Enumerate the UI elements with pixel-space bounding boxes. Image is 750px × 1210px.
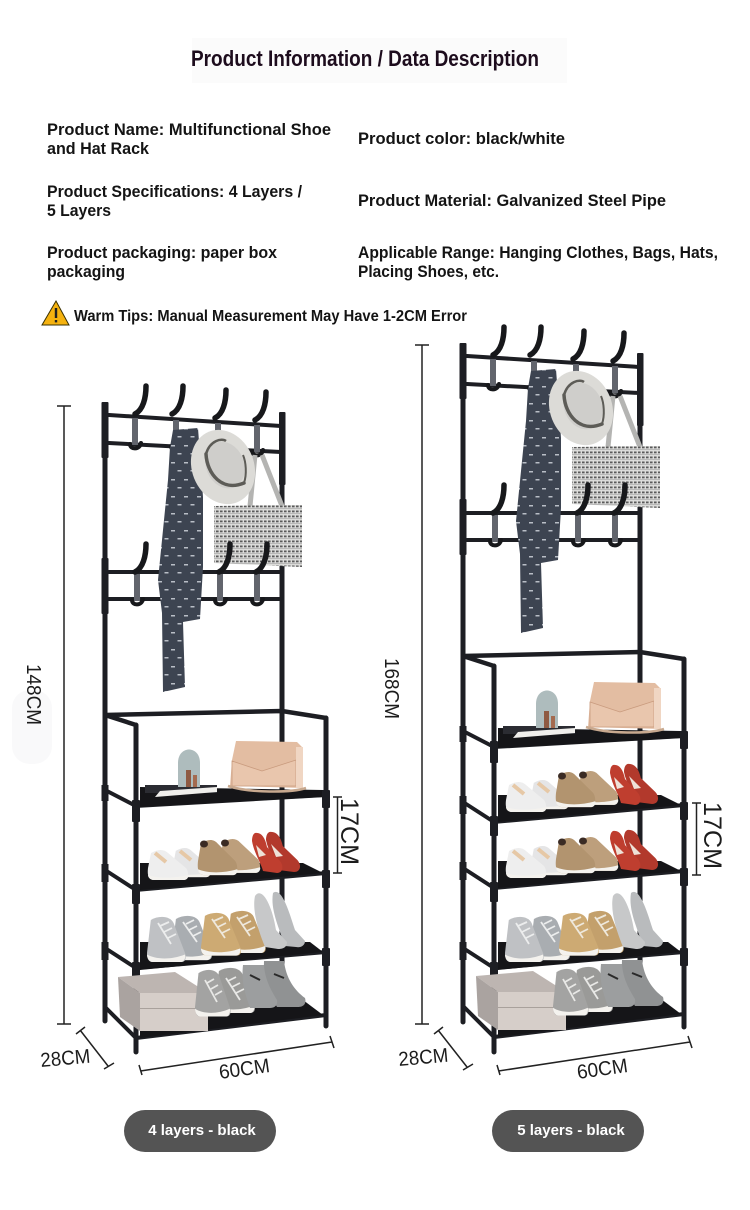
applicable range: Placing Shoes, etc. xyxy=(358,262,499,281)
icon: warning triangle xyxy=(42,301,69,325)
dimension: 17CM shelf spacing, 4 layers: 17CM xyxy=(335,798,363,865)
label pill: 5 layers - black xyxy=(492,1110,644,1152)
shelf 4 with box and boots xyxy=(105,961,326,1038)
dimension: 28CM depth, 4 layers: 28CM xyxy=(40,1046,91,1072)
shelf 5 with box and boots xyxy=(463,960,684,1037)
warm tips text: Warm Tips: Manual Measurement May Have 1-2CM Error xyxy=(74,308,467,325)
rack frame xyxy=(460,343,684,993)
dimension: 60CM width, 4 layers: 60CM xyxy=(218,1055,271,1084)
product name: and Hat Rack xyxy=(47,139,150,158)
product specifications: 5 Layers xyxy=(47,201,111,220)
shelf 3 with shoes xyxy=(102,892,330,982)
dimension: 148CM height xyxy=(12,406,71,1024)
shelf 2 with shoes xyxy=(102,832,330,904)
shelf 4 with shoes xyxy=(460,892,688,982)
warm tips callout xyxy=(42,301,467,325)
dimension: 168CM height xyxy=(380,345,429,1024)
product information text block xyxy=(47,120,718,281)
shelf 1 with items xyxy=(460,682,688,763)
dimension: 28CM depth, 5 layers: 28CM xyxy=(398,1045,449,1071)
shelf 1 with items xyxy=(102,741,330,822)
dimension: 60CM width, 4 layers xyxy=(139,1036,334,1084)
shelf 3 with shoes xyxy=(460,830,688,902)
shelf 2 with shoes xyxy=(460,764,688,836)
product specifications: Product Specifications: 4 Layers / xyxy=(47,182,302,201)
dimension: 28CM depth, 4 layers xyxy=(40,1027,114,1072)
coat hooks with scarf, hat and bag xyxy=(109,386,302,692)
product material: Product Material: Galvanized Steel Pipe xyxy=(358,191,666,210)
frame post extensions xyxy=(463,946,684,1052)
dimension: 28CM depth, 5 layers xyxy=(398,1027,473,1071)
label pill: 4 layers - black xyxy=(124,1110,276,1152)
label pill: 5 layers - black: 5 layers - black xyxy=(517,1122,625,1139)
dimension: 60CM width, 5 layers xyxy=(497,1036,692,1084)
rack frame xyxy=(102,402,326,1052)
rack: 5 layers xyxy=(460,327,688,1052)
product packaging: Product packaging: paper box xyxy=(47,243,278,262)
label pill: 4 layers - black: 4 layers - black xyxy=(148,1122,256,1139)
applicable range: Applicable Range: Hanging Clothes, Bags, Hats, xyxy=(358,243,718,262)
dimension: 17CM shelf spacing, 5 layers: 17CM xyxy=(698,802,726,869)
product packaging: packaging xyxy=(47,262,125,281)
product name: Product Name: Multifunctional Shoe xyxy=(47,120,331,139)
title: Product Information / Data Description xyxy=(191,46,539,71)
product color: Product color: black/white xyxy=(358,129,565,148)
rack: 4 layers xyxy=(102,386,330,1052)
dimension: 148CM height: 148CM xyxy=(22,664,44,725)
coat hooks with scarf, hat and bag xyxy=(467,327,660,633)
dimension: 60CM width, 5 layers: 60CM xyxy=(576,1055,629,1084)
title xyxy=(191,38,567,83)
dimension: 168CM height: 168CM xyxy=(380,658,402,719)
